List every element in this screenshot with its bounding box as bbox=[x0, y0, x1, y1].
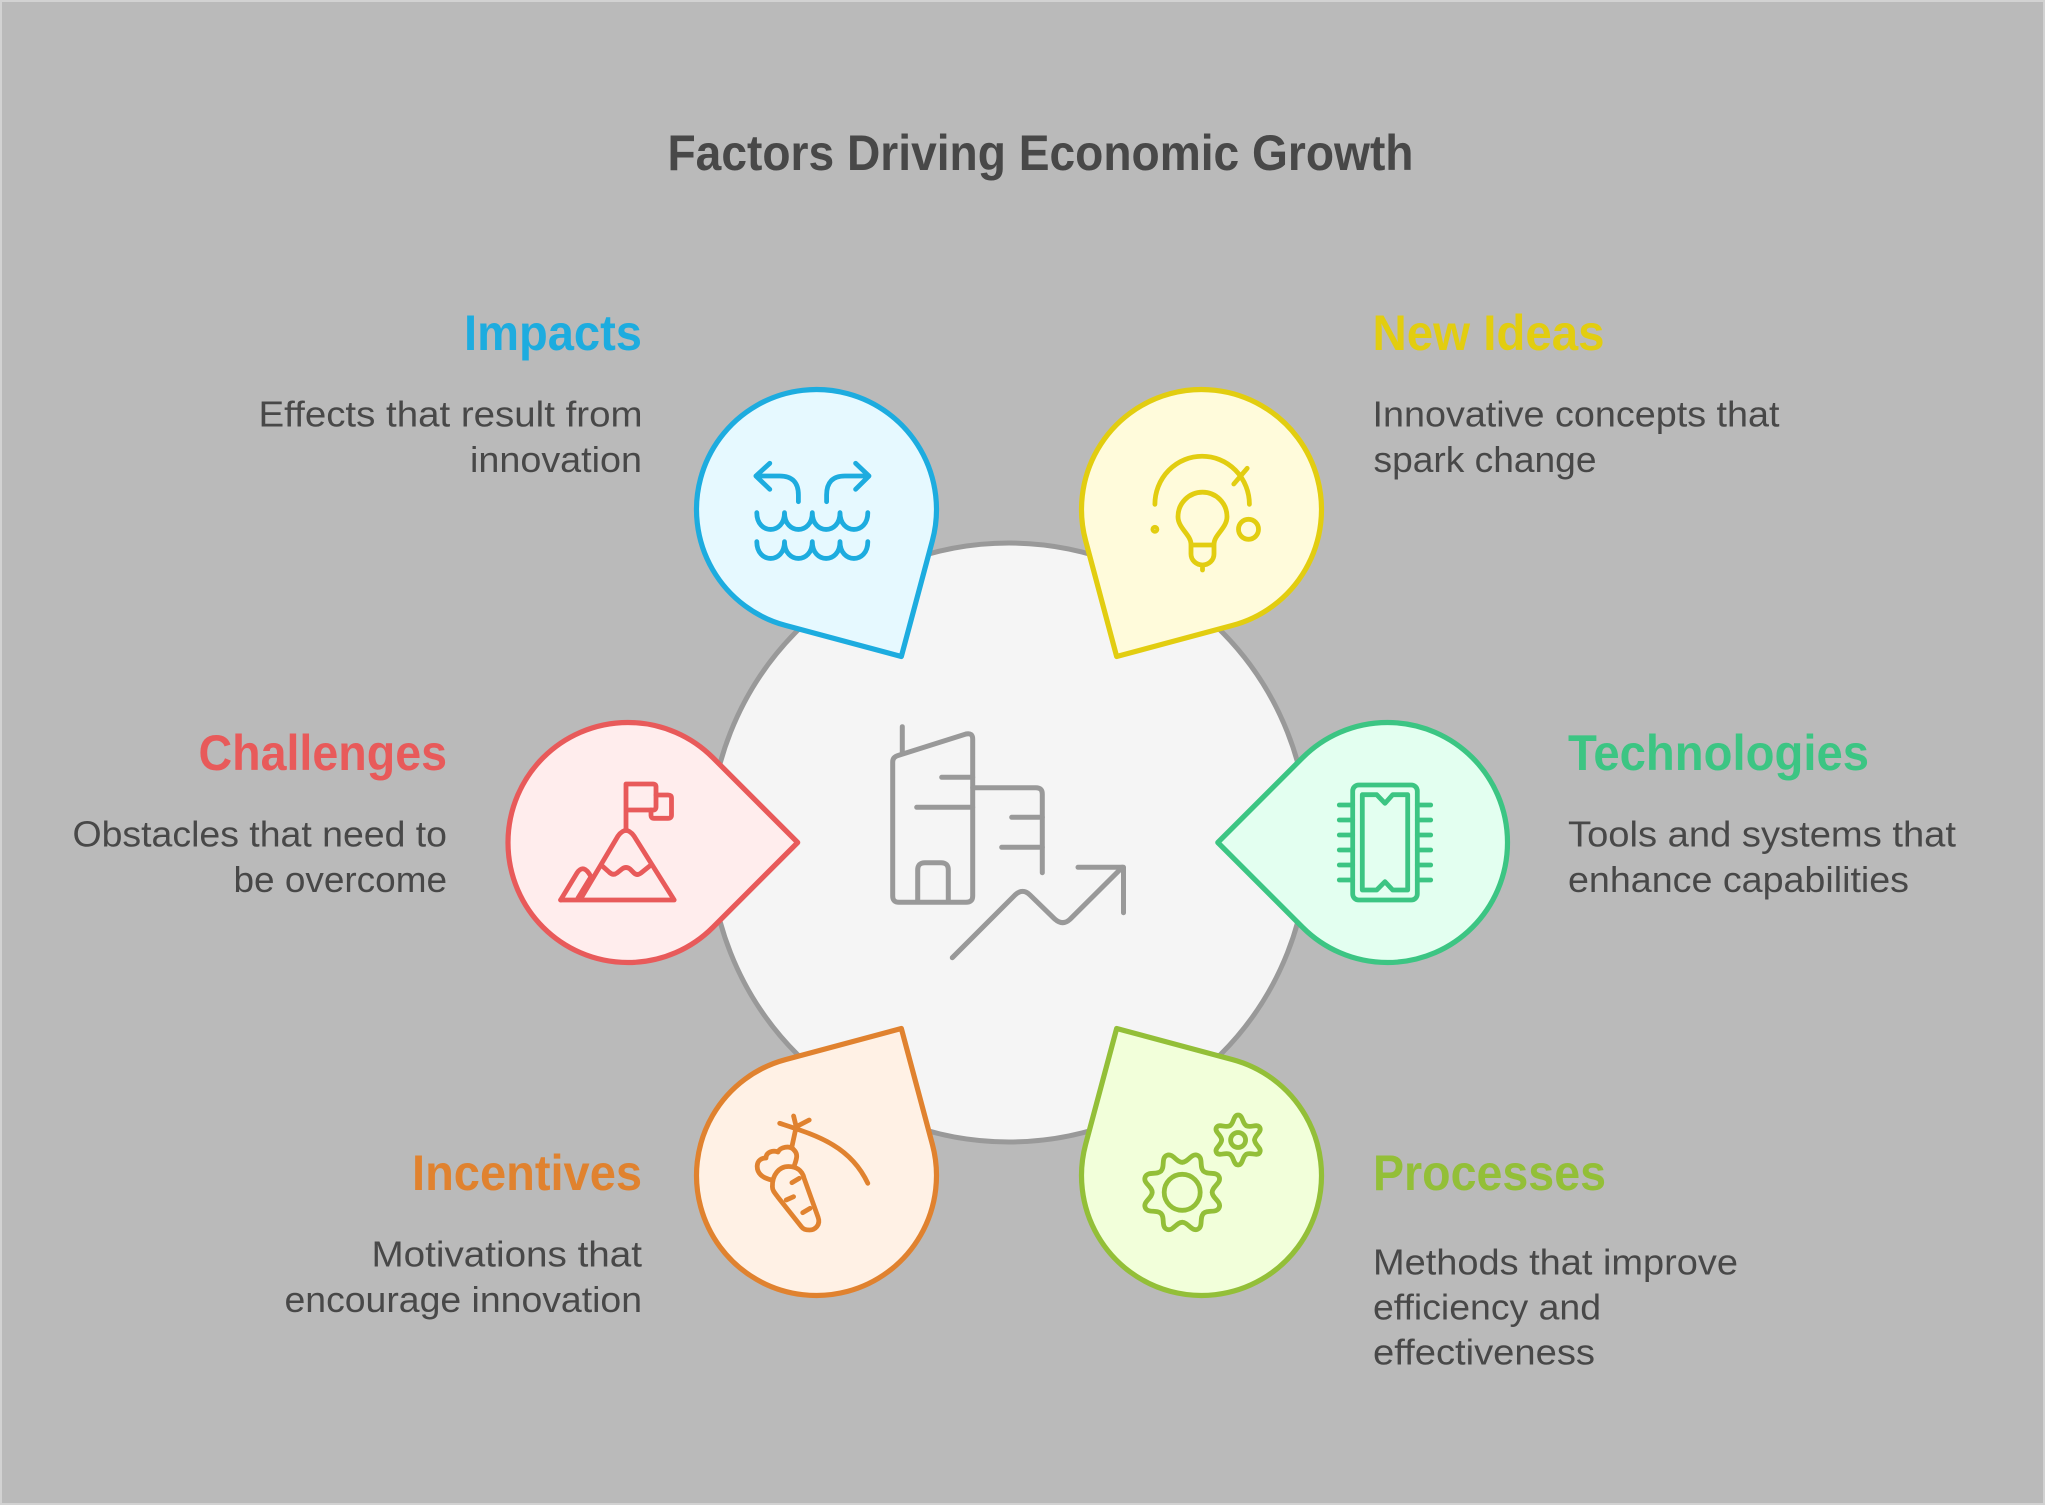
heading: challenges: Challenges bbox=[198, 725, 447, 781]
description: new ideas: Innovative concepts that bbox=[1372, 394, 1780, 434]
panel: new ideas bbox=[1013, 305, 1780, 716]
heading: incentives: Incentives bbox=[412, 1145, 642, 1201]
title: Factors Driving Economic Growth bbox=[668, 125, 1414, 181]
description: impacts bbox=[258, 394, 642, 480]
icon: light bulb with arc bbox=[1153, 456, 1258, 570]
description: new ideas bbox=[1372, 394, 1780, 480]
description: incentives bbox=[284, 1234, 642, 1320]
description: technologies: enhance capabilities bbox=[1568, 859, 1909, 900]
heading: processes: Processes bbox=[1373, 1145, 1606, 1201]
description: technologies: Tools and systems that bbox=[1568, 814, 1956, 854]
panel: processes bbox=[1013, 969, 1738, 1372]
icon: mountain with flag bbox=[561, 784, 674, 900]
icon: buildings and growth arrow bbox=[893, 727, 1124, 958]
heading: impacts: Impacts bbox=[464, 305, 642, 361]
heading: technologies: Technologies bbox=[1568, 725, 1869, 781]
description: new ideas: spark change bbox=[1374, 439, 1596, 480]
icon: diverging arrows over waves bbox=[756, 463, 869, 558]
heading: new ideas: New Ideas bbox=[1372, 305, 1604, 361]
panel: technologies bbox=[1218, 722, 1956, 962]
teardrop: processes bbox=[1013, 969, 1365, 1339]
teardrop: technologies bbox=[1218, 722, 1508, 962]
teardrop: new ideas bbox=[1013, 346, 1365, 716]
icon: gears bbox=[1141, 1115, 1264, 1234]
description: impacts: Effects that result from bbox=[258, 394, 642, 434]
description: processes: efficiency and bbox=[1373, 1286, 1601, 1328]
description: processes: Methods that improve bbox=[1373, 1242, 1738, 1282]
description: impacts: innovation bbox=[470, 439, 642, 480]
description: incentives: encourage innovation bbox=[284, 1279, 642, 1320]
description: challenges bbox=[72, 814, 447, 900]
panel: incentives bbox=[284, 969, 1005, 1339]
central circle bbox=[710, 543, 1308, 1142]
description: challenges: Obstacles that need to bbox=[72, 814, 447, 854]
description: processes bbox=[1373, 1242, 1738, 1372]
teardrop: incentives bbox=[653, 969, 1005, 1339]
description: challenges: be overcome bbox=[234, 859, 447, 900]
icon: carrot on a stick bbox=[757, 1116, 868, 1230]
description: technologies bbox=[1568, 814, 1956, 900]
icon: microchip bbox=[1339, 785, 1431, 900]
panel: challenges bbox=[72, 722, 798, 962]
teardrop: challenges bbox=[508, 722, 798, 962]
teardrop: impacts bbox=[653, 346, 1005, 716]
panel: impacts bbox=[258, 305, 1005, 716]
description: incentives: Motivations that bbox=[372, 1234, 642, 1274]
description: processes: effectiveness bbox=[1373, 1332, 1595, 1372]
